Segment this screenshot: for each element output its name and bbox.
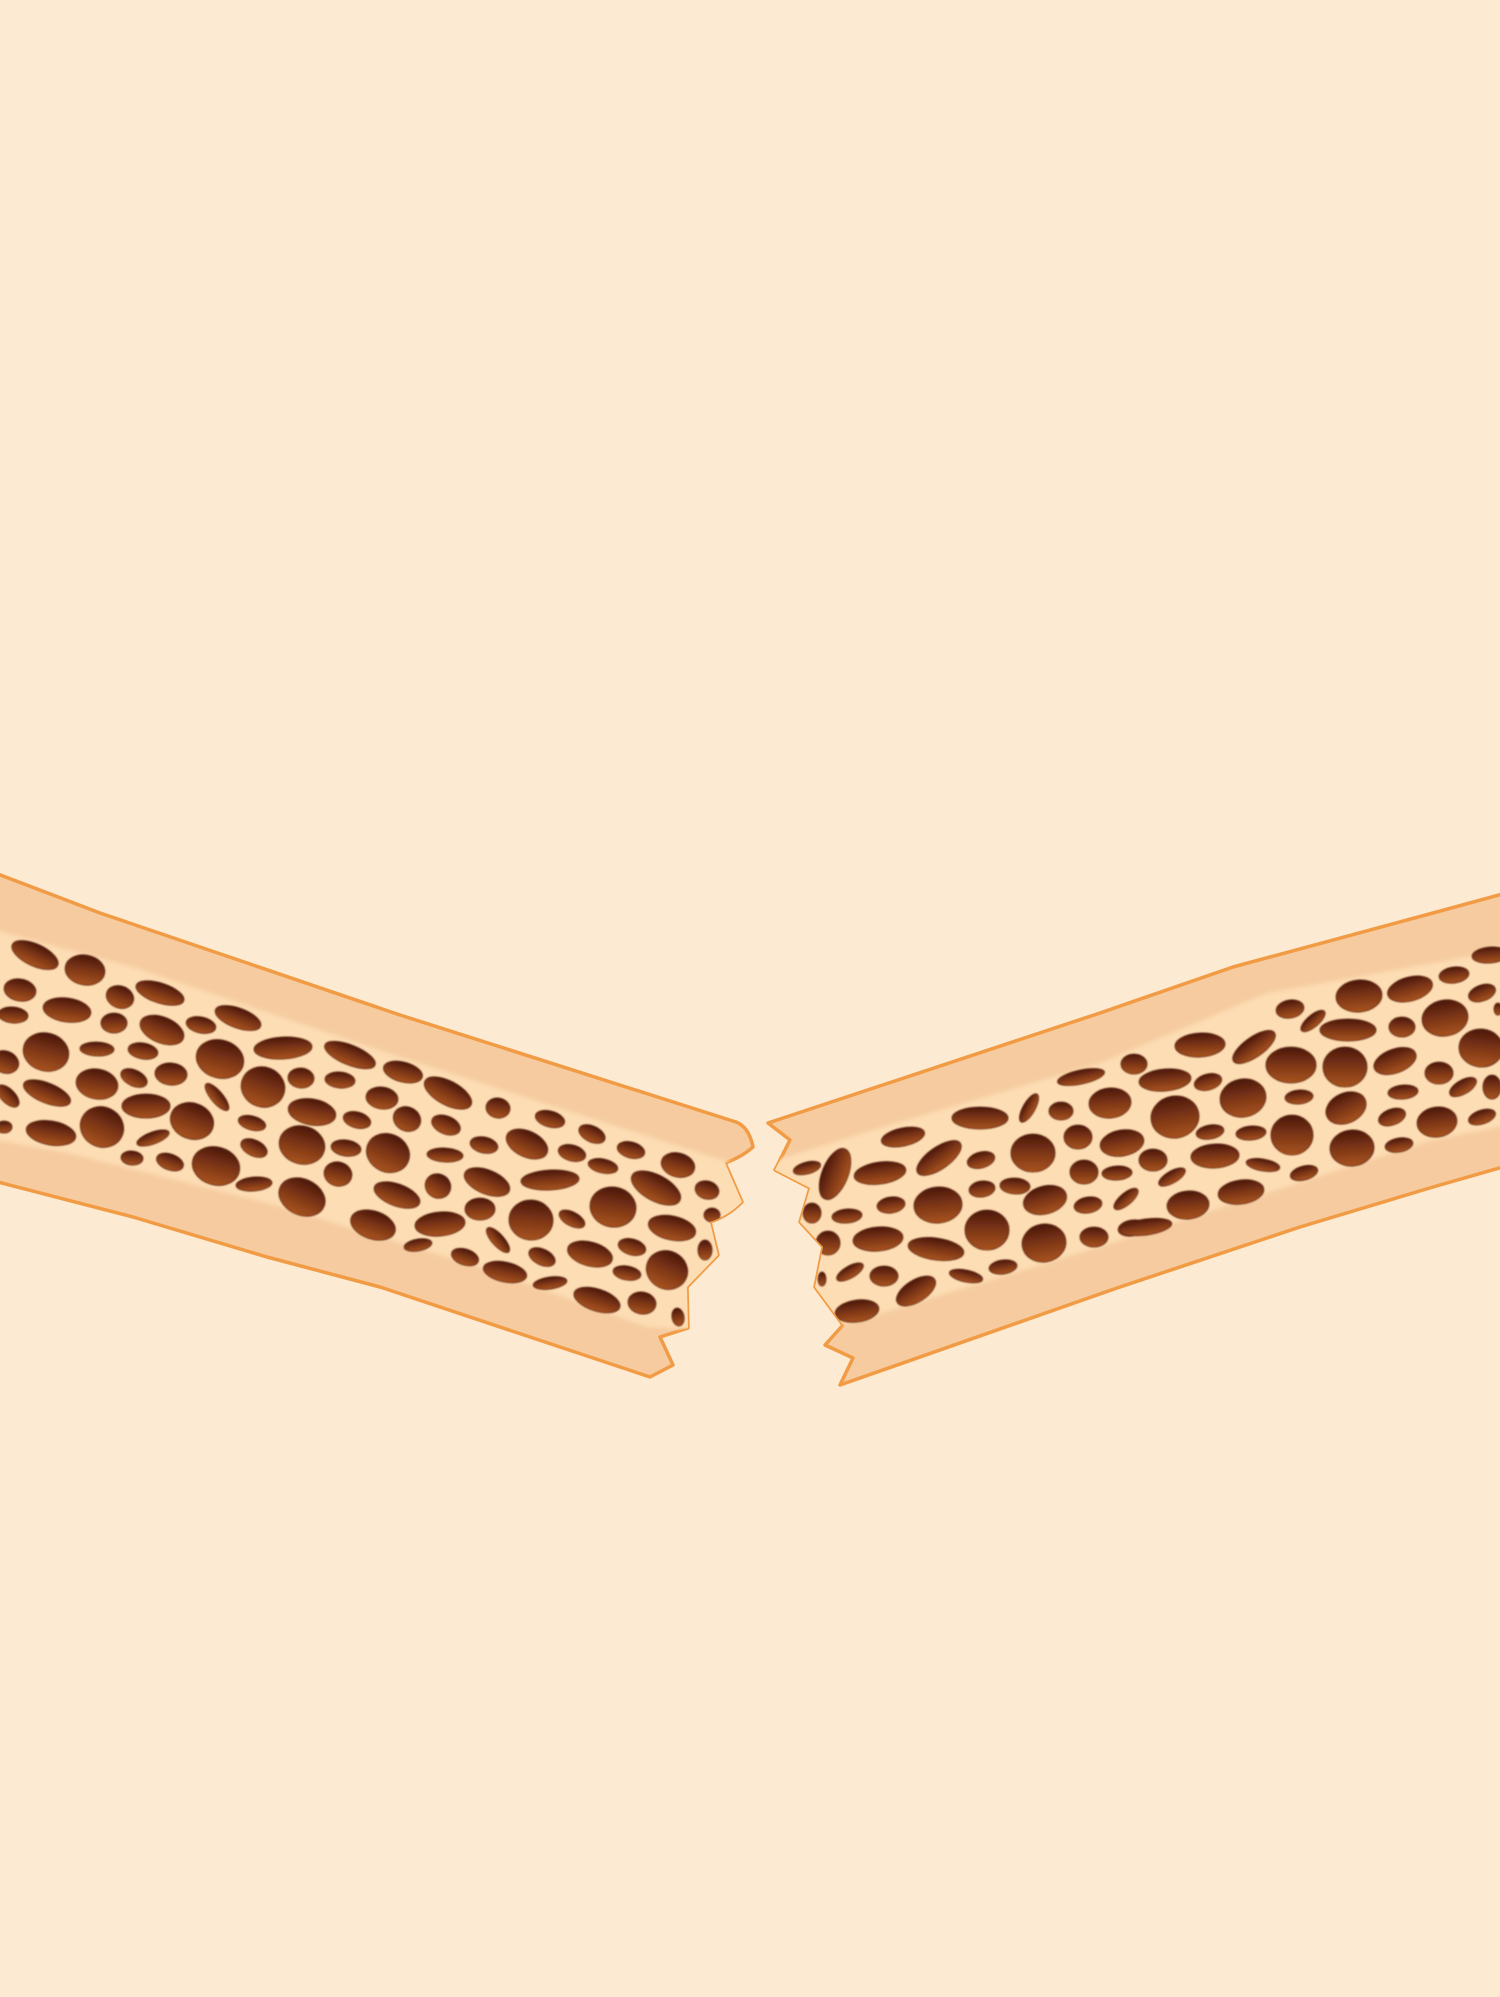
icon: right bone fragment: [760, 892, 1500, 1385]
icon: left bone fragment: [0, 871, 760, 1377]
illustration: fractured bone: [0, 873, 1500, 1387]
right bone pores: [792, 945, 1500, 1325]
right bone spongy interior: [760, 945, 1500, 1330]
left bone pores: [0, 934, 721, 1327]
right bone cortical shell: [768, 892, 1500, 1385]
left bone spongy interior: [0, 930, 760, 1335]
left bone cortical shell: [0, 871, 753, 1377]
